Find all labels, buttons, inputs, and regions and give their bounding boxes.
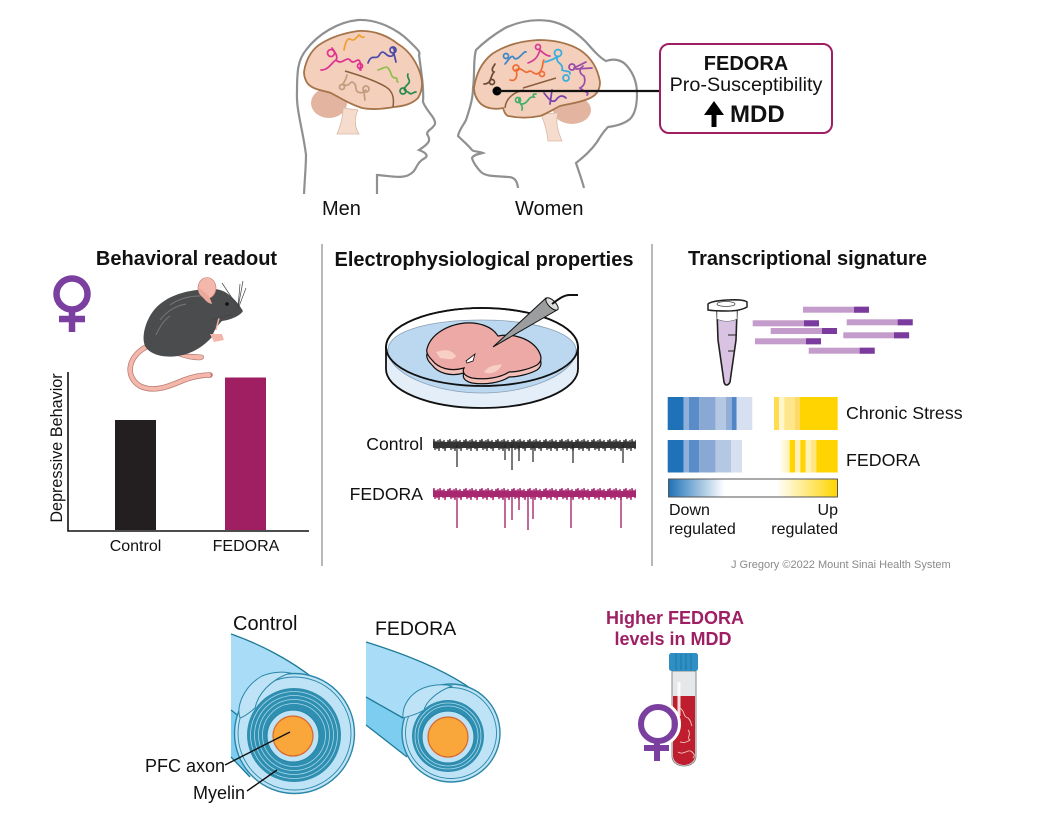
- panel: men head and brain: [297, 20, 435, 194]
- illustration: myelinated axon, Control: [231, 634, 354, 794]
- callout: FEDORA pro-susceptibility: FEDORA: [704, 53, 788, 75]
- callout line to FEDORA box: [492, 86, 660, 96]
- callout: FEDORA pro-susceptibility: Pro-Susceptibility: [670, 74, 823, 96]
- callout: FEDORA pro-susceptibility: MDD: [730, 101, 785, 128]
- bar chart: depressive behavior: Control: [110, 538, 161, 555]
- brain: men: [304, 31, 422, 109]
- bar chart: depressive behavior: Depressive Behavior: [48, 373, 66, 523]
- color scale legend: regulated: [771, 521, 838, 538]
- heading: higher FEDORA levels: [606, 608, 744, 649]
- heading: behavioral readout: Behavioral readout: [96, 248, 277, 270]
- bar chart: depressive behavior: [48, 372, 309, 555]
- label: Men: Men: [322, 198, 361, 220]
- panel: women head and brain: [458, 20, 637, 188]
- illustration: myelinated axon, FEDORA: [366, 642, 500, 782]
- brain: women: [474, 40, 600, 118]
- label: FEDORA heatmap: FEDORA: [846, 450, 920, 470]
- callout: PFC axon: [145, 732, 290, 776]
- RNA squiggles: women: [484, 44, 592, 110]
- electrophysiology trace: FEDORA: [433, 486, 636, 530]
- icon: female symbol: [56, 278, 88, 332]
- divider left: [321, 244, 323, 566]
- icon: mouse: [130, 278, 246, 389]
- trace label: Control: Control: [366, 434, 423, 454]
- head outline: women: [458, 20, 637, 188]
- sequencing reads: [753, 307, 913, 354]
- pipette: [493, 298, 557, 347]
- electrophysiology trace: Control: [433, 437, 636, 470]
- callout: Myelin: [193, 770, 277, 803]
- cerebellum: men: [311, 88, 347, 118]
- brain stem: women: [541, 113, 562, 141]
- RNA squiggles: men: [321, 35, 416, 100]
- heatmap row: chronic stress: [668, 397, 838, 430]
- icon: female symbol on blood tube: [638, 704, 678, 761]
- temporal lobe fold: women: [505, 78, 556, 108]
- label: Control axon: Control: [233, 613, 297, 635]
- label: Women: Women: [515, 198, 584, 220]
- credit: J Gregory ©2022 Mount Sinai Health System: [731, 559, 951, 571]
- heatmap row: FEDORA: [668, 440, 838, 472]
- icon: blood tube: [669, 653, 698, 766]
- callout: PFC axon: PFC axon: [145, 756, 225, 776]
- label: Chronic Stress: Chronic Stress: [846, 403, 963, 423]
- icon: RNA tube: [708, 300, 747, 385]
- brain stem: men: [337, 108, 359, 134]
- label: FEDORA axon: FEDORA: [375, 618, 456, 640]
- callout: Myelin: Myelin: [193, 783, 245, 803]
- brain slice: [427, 328, 541, 384]
- cerebellum: women: [553, 96, 591, 124]
- heading: higher FEDORA levels: Higher FEDORA: [606, 608, 744, 628]
- trace label: FEDORA: FEDORA: [350, 484, 423, 504]
- callout: FEDORA pro-susceptibility: [660, 44, 832, 133]
- color scale legend: Up: [818, 502, 838, 519]
- heading: electrophysiological properties: Electrophysiological properties: [335, 249, 633, 271]
- color scale legend: regulated: [669, 521, 736, 538]
- color scale legend: Down: [669, 502, 710, 519]
- heading: higher FEDORA levels: levels in MDD: [614, 629, 732, 649]
- heading: transcriptional signature: Transcriptional signature: [688, 248, 927, 270]
- divider right: [651, 244, 653, 566]
- color scale legend: [668, 479, 838, 538]
- bar chart: depressive behavior: FEDORA: [213, 538, 280, 555]
- illustration: petri dish with brain slice and pipette: [386, 295, 578, 408]
- temporal lobe fold: men: [345, 71, 393, 107]
- head outline: men: [297, 20, 435, 194]
